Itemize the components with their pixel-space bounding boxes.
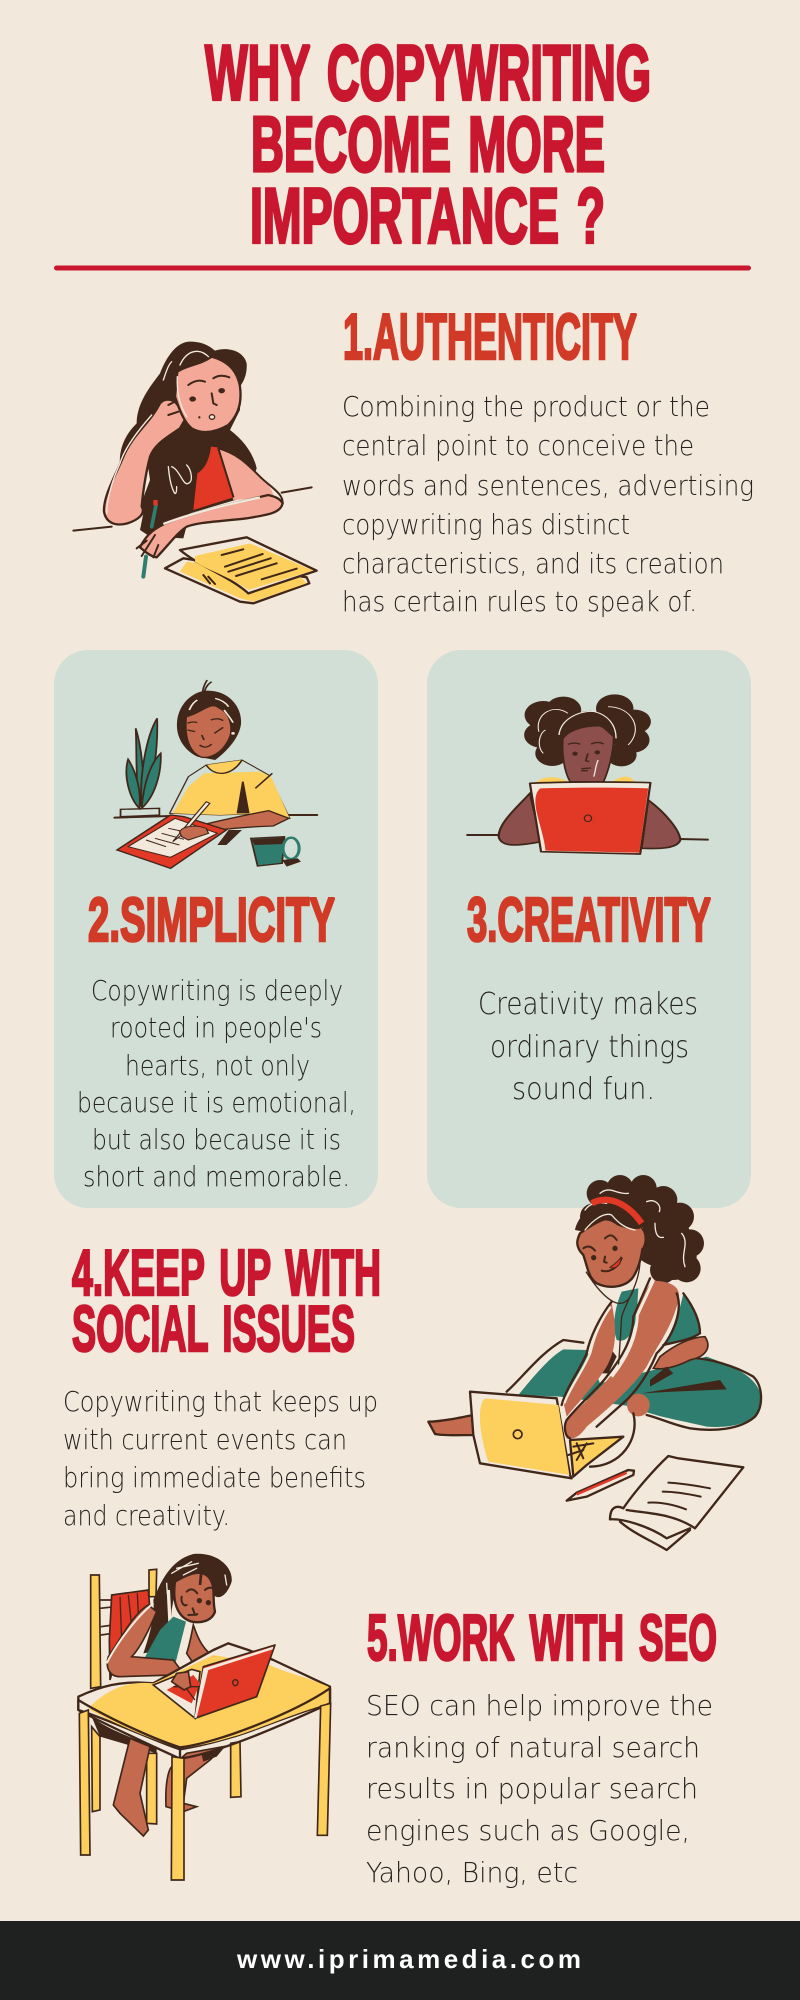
text block: authenticity: Combining the product or the	[342, 391, 710, 423]
text block: creativity: ordinary things	[490, 1030, 689, 1065]
text block: seo: SEO can help improve the	[366, 1690, 713, 1722]
text block: social issues	[63, 1386, 378, 1532]
text block: authenticity: has certain rules to speak of.	[342, 586, 697, 618]
text block: authenticity: words and sentences, advertising	[342, 470, 754, 502]
illustration: woman writing on tablet with plant and mug	[115, 680, 317, 868]
text block: social issues: Copywriting that keeps up	[63, 1386, 378, 1418]
title	[205, 28, 651, 260]
text block: creativity: Creativity makes	[478, 987, 698, 1022]
title underline	[54, 266, 751, 270]
heading: 2.simplicity: 2.SIMPLICITY	[88, 886, 335, 955]
text block: seo: engines such as Google,	[366, 1815, 690, 1847]
text block: creativity	[478, 987, 698, 1107]
text block: seo: results in popular search	[366, 1773, 698, 1805]
illustration: woman at yellow table with red laptop	[78, 1554, 331, 1880]
illustration: woman behind red laptop	[467, 694, 708, 854]
text block: seo: ranking of natural search	[366, 1732, 700, 1764]
text block: simplicity: because it is emotional,	[77, 1087, 356, 1119]
text block: seo: Yahoo, Bing, etc	[366, 1857, 578, 1889]
footer	[0, 1921, 800, 2000]
text block: authenticity: characteristics, and its creation	[342, 548, 724, 580]
text block: authenticity: copywriting has distinct	[342, 509, 630, 541]
text block: simplicity: but also because it is	[92, 1124, 341, 1156]
heading: 4.keep up with social issues: 4.KEEP UP WITH	[72, 1236, 381, 1309]
illustration: woman sitting on floor with yellow laptop	[428, 1175, 762, 1550]
illustration: woman thinking with papers	[73, 342, 317, 603]
panel: simplicity	[54, 650, 378, 1208]
heading: 4.keep up with social issues: SOCIAL ISSUES	[72, 1292, 355, 1365]
text block: social issues: with current events can	[63, 1424, 347, 1456]
text block: authenticity: central point to conceive the	[342, 430, 694, 462]
text block: social issues: bring immediate benefits	[63, 1462, 366, 1494]
heading: 4.keep up with social issues	[72, 1236, 381, 1365]
text block: social issues: and creativity.	[63, 1500, 230, 1532]
footer: www.iprimamedia.com	[236, 1944, 581, 1974]
text block: simplicity: Copywriting is deeply	[91, 975, 343, 1007]
text block: authenticity	[342, 391, 754, 618]
text block: simplicity	[77, 975, 356, 1193]
text block: simplicity: rooted in people's	[110, 1012, 322, 1044]
text block: creativity: sound fun.	[512, 1072, 655, 1107]
text block: seo	[366, 1690, 713, 1889]
panel: creativity	[427, 650, 751, 1208]
text block: simplicity: hearts, not only	[125, 1050, 310, 1082]
text block: simplicity: short and memorable.	[83, 1161, 350, 1193]
